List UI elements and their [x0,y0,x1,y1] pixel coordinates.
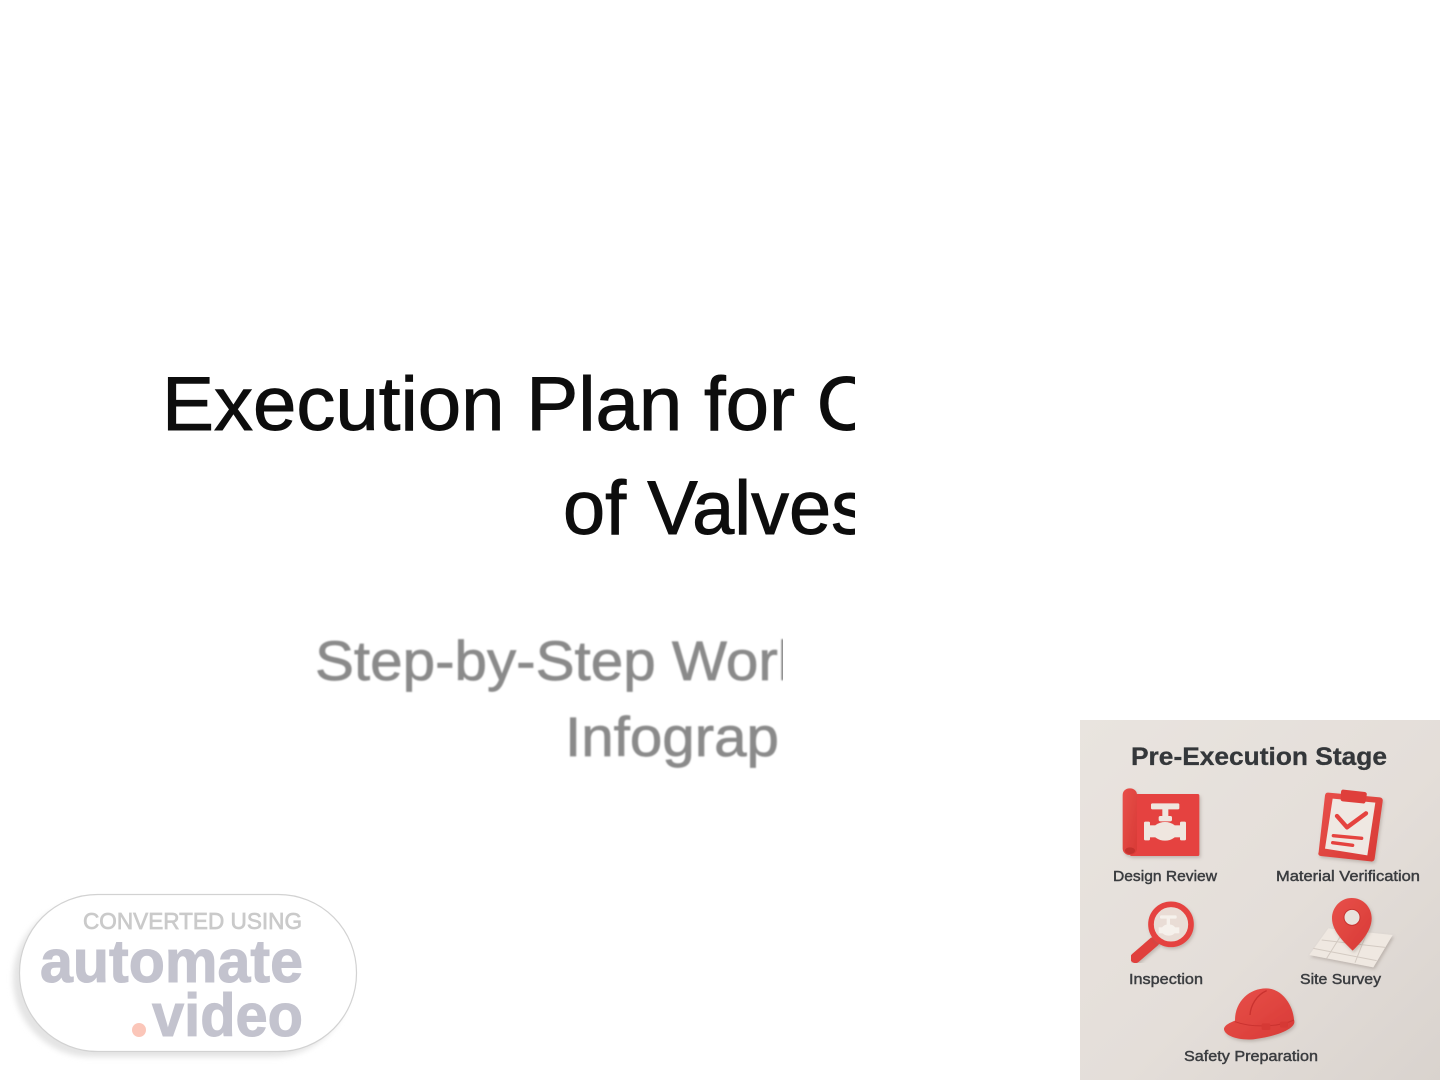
title: Execution Plan [168,374,855,535]
subtitle: step-by-step workflow [316,638,783,769]
subtitle: step-by-step workflow: Infograp [565,705,779,768]
heading: Pre-Execution Stage: Pre-Execution Stage [1131,743,1387,771]
label: Site Survey: Site Survey [1300,971,1382,988]
icon: magnifier inspecting valve [1135,904,1191,958]
badge text: video: video [152,982,303,1049]
icon: design blueprint with valve [1123,788,1199,856]
title: Execution Plan: of Valves [563,466,869,551]
label: Material Verification: Material Verification [1276,868,1420,885]
badge text: converted using: CONVERTED USING [83,908,302,934]
icon: location pin on map [1309,898,1393,967]
badge: converted using automate.video [13,894,356,1057]
label: Safety Preparation: Safety Preparation [1184,1048,1318,1065]
label: Inspection: Inspection [1129,971,1203,988]
panel: pre-execution stage [1080,720,1440,1080]
label: Design Review: Design Review [1113,868,1217,885]
icon: safety hard hat [1224,988,1294,1040]
icon: clipboard checklist [1318,790,1383,861]
badge dot: orange period [132,1023,146,1037]
title: Execution Plan: Execution Plan for C [162,362,873,447]
subtitle: step-by-step workflow: Step-by-Step Work [315,629,808,692]
badge text: automate: automate [40,928,303,995]
